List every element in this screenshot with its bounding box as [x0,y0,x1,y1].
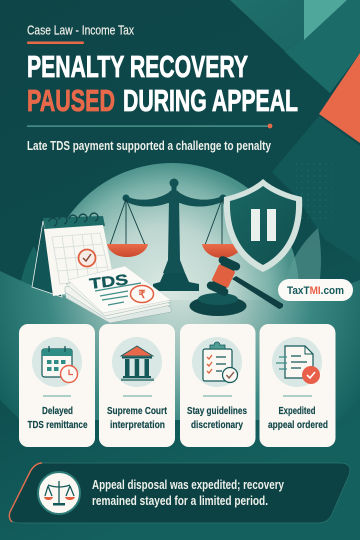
card label [268,406,328,431]
card: supreme court interpretation [99,324,175,447]
icon: clipboard checklist [192,337,242,387]
conclusion banner [9,463,350,523]
strings [110,199,240,245]
card label: Expedited [278,406,316,417]
scales of justice [107,178,243,291]
conclusion text: Appeal disposal was expedited; recovery [92,478,284,492]
website pill [278,279,353,301]
card label: Delayed [42,406,73,417]
eyebrow underline [27,42,84,44]
decorative geometric shapes [230,0,360,262]
card label [107,406,168,431]
floor [0,271,360,420]
card label [187,406,247,431]
card: expedited appeal ordered [260,324,336,447]
TDS label: TDS [88,271,129,293]
eyebrow label: Case Law - Income Tax [27,24,135,38]
icon: document with check [272,337,322,387]
conclusion text [92,478,284,508]
icon: scales in circle [38,472,80,514]
dome backdrop [45,163,299,417]
card label: interpretation [110,420,165,431]
hero illustration [0,163,360,420]
card label: TDS remittance [28,420,88,431]
rupee symbol: ₹ [138,289,146,301]
beam [125,193,224,207]
card label: Stay guidelines [187,406,247,417]
card label: Supreme Court [107,406,168,417]
left pan [107,244,148,257]
card label: appeal ordered [268,420,328,431]
calendar [32,213,115,297]
TDS document stack [65,266,171,323]
title: PAUSED [27,84,115,118]
title rule with dot [27,124,272,128]
card: delayed TDS remittance [19,324,95,447]
pivot and finial [122,178,226,204]
subtitle: Late TDS payment supported a challenge to penalty [27,139,271,153]
post [163,200,185,273]
foliage right [285,228,321,292]
base [153,273,199,291]
website pill: TaxTMI.com [287,285,344,297]
gavel [190,255,283,316]
conclusion text: remained stayed for a limited period. [92,494,268,508]
card label [28,406,88,431]
foliage left [20,246,50,300]
title [27,50,298,118]
icon: calendar with clock [32,337,82,387]
orange edge accent [9,463,42,522]
shield with pause symbol [224,179,302,272]
icon: court building [112,337,162,387]
card label: discretionary [191,420,243,431]
title: PENALTY RECOVERY [27,50,248,84]
right pan [202,244,243,258]
card: stay guidelines discretionary [180,324,256,447]
